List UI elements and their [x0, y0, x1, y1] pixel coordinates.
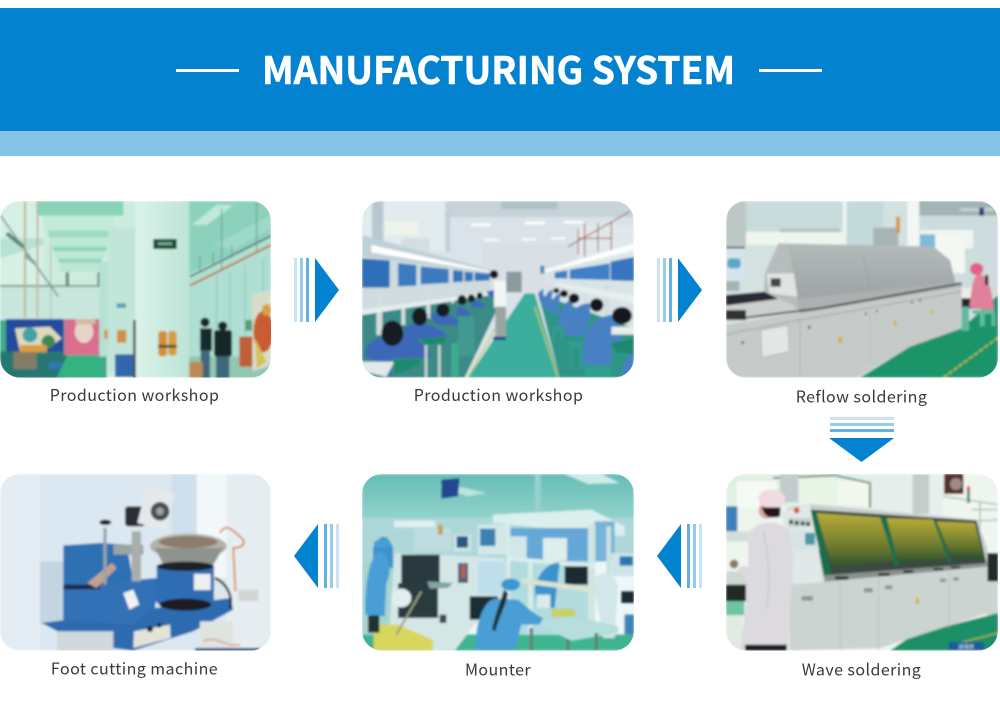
caption: Foot cutting machine: [51, 656, 218, 680]
caption: Production workshop: [414, 382, 583, 406]
photo: wave soldering machine: 波峰焊: [958, 642, 975, 650]
panel: reflow soldering: [726, 201, 998, 408]
caption: Wave soldering: [802, 656, 921, 680]
machine base: [63, 543, 158, 625]
rack: [493, 510, 625, 536]
photo: reflow oven: [726, 201, 998, 378]
table: [42, 598, 233, 651]
caption: Production workshop: [50, 382, 219, 406]
panel: production workshop 1: [0, 201, 273, 406]
front worker: [476, 599, 543, 651]
arrow: left 1: [294, 524, 339, 588]
left bench: [726, 506, 737, 531]
worker: [961, 287, 972, 299]
worker: [737, 523, 793, 651]
panel: foot cutting machine: [0, 474, 271, 680]
panel: wave soldering: [726, 474, 998, 680]
standing man: [494, 281, 506, 308]
photo: factory hall with columns: [0, 201, 273, 378]
right workers: [538, 288, 622, 365]
left workers: [373, 537, 393, 568]
control box: [133, 625, 171, 648]
caption: Mounter: [465, 656, 531, 680]
floor: [860, 295, 998, 378]
photo: wave soldering machine: [726, 474, 998, 651]
arrow: down: [829, 417, 894, 462]
oven hood: [765, 243, 956, 310]
header banner: [0, 8, 1000, 156]
mounter machine: [390, 553, 506, 651]
title: MANUFACTURING SYSTEM: [262, 40, 735, 95]
photo: SMT mounter room: [362, 474, 634, 651]
arrow: left 2: [657, 524, 702, 588]
arrow: right 2: [657, 258, 702, 322]
left workers: [365, 290, 494, 378]
panel: production workshop 2: [362, 201, 634, 406]
panel: mounter: [362, 474, 634, 680]
oven lower body: [726, 285, 962, 378]
photo: assembly line workers: [362, 201, 634, 378]
arrow: right 1: [294, 258, 339, 322]
bowl feeder: [149, 532, 228, 554]
photo: lead cutting machine: [0, 474, 271, 651]
caption: Reflow soldering: [796, 384, 927, 408]
machine: [787, 504, 987, 651]
